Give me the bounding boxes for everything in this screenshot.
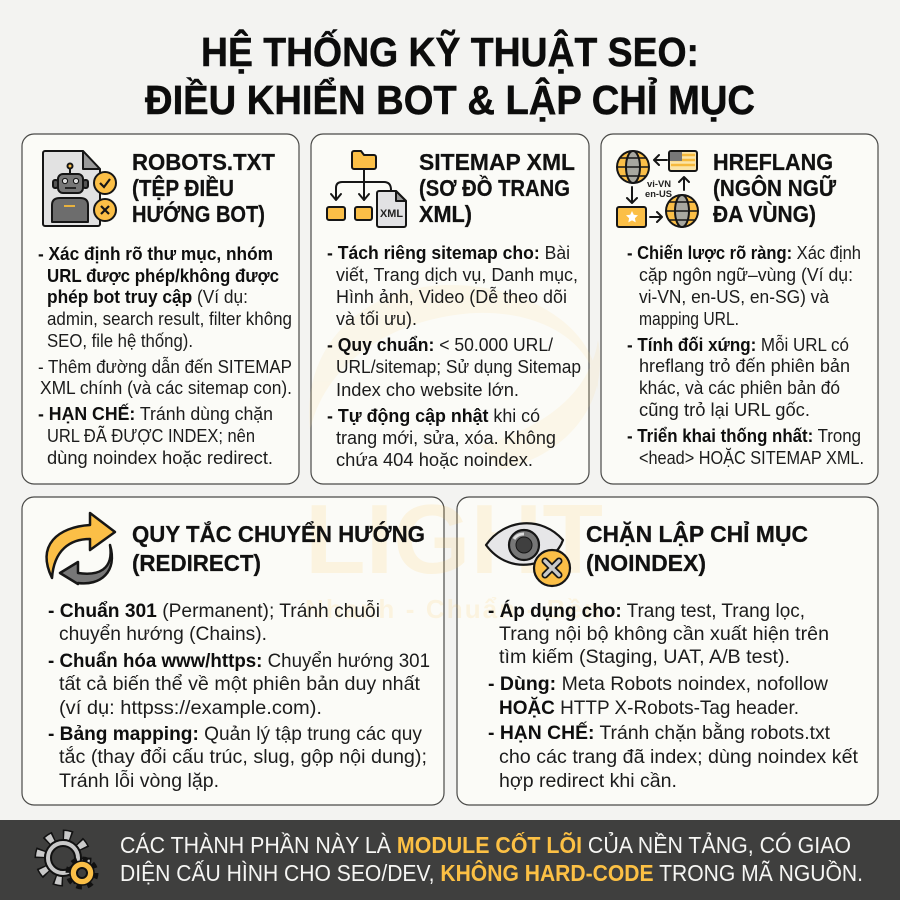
title: HỆ THỐNG KỸ THUẬT SEO: — [201, 29, 699, 75]
heading: robots.txt: HƯỚNG BOT) — [132, 200, 265, 227]
panel: sitemap card — [311, 134, 589, 484]
text block: robots.txt rules: - Thêm đường dẫn đến SITEMAP — [38, 356, 292, 377]
text block: sitemap rules: Hình ảnh, Video (Dễ theo dõi — [336, 286, 567, 307]
watermark logo: LIGHT — [305, 484, 603, 594]
text block: sitemap rules: và tối ưu). — [336, 309, 417, 329]
text block: hreflang rules: hreflang trỏ đến phiên bản — [639, 356, 850, 376]
text block: hreflang rules: - Tính đối xứng: Mỗi URL có — [627, 334, 849, 355]
text block: robots.txt rules: dùng noindex hoặc redirect. — [47, 448, 273, 468]
text block: hreflang rules: khác, và các phiên bản đó — [639, 378, 840, 398]
heading: redirect: (REDIRECT) — [132, 550, 261, 576]
heading: redirect: QUY TẮC CHUYỂN HƯỚNG — [132, 520, 425, 547]
text block: robots.txt rules: phép bot truy cập (Ví dụ: — [47, 287, 248, 307]
text block: hreflang rules: cặp ngôn ngữ–vùng (Ví dụ: — [639, 265, 853, 285]
heading: sitemap xml: XML) — [419, 201, 472, 227]
text block: hreflang rules: vi-VN, en-US, en-SG) và — [639, 287, 830, 307]
text block: robots.txt rules: SEO, file hệ thống). — [47, 331, 193, 351]
heading: noindex: (NOINDEX) — [586, 550, 706, 576]
text block: sitemap rules: trang mới, sửa, xóa. Không — [336, 428, 556, 448]
heading: robots.txt: (TỆP ĐIỀU — [132, 174, 234, 201]
heading: noindex — [586, 519, 808, 576]
heading: noindex: CHẶN LẬP CHỈ MỤC — [586, 519, 808, 547]
watermark logo: Nhanh - Chuẩn - Bền — [305, 594, 600, 624]
icon: gears — [40, 835, 95, 886]
panel: robots.txt card — [22, 134, 299, 484]
text block: redirect rules: chuyển hướng (Chains). — [59, 624, 267, 645]
title — [145, 29, 755, 123]
text block: sitemap rules: Index cho website lớn. — [336, 380, 519, 400]
heading: sitemap xml — [419, 149, 575, 227]
text block: noindex rules: - HẠN CHẾ: Tránh chặn bằng robots.txt — [488, 722, 831, 744]
text block: robots.txt rules — [38, 244, 292, 468]
text block: noindex rules: tìm kiếm (Staging, UAT, A/B test). — [499, 647, 790, 668]
text block: noindex rules: HOẶC HTTP X-Robots-Tag header. — [499, 697, 799, 719]
panel: hreflang card — [601, 134, 878, 484]
icon: hreflang globes and flags — [617, 151, 698, 227]
heading: sitemap xml: SITEMAP XML — [419, 149, 575, 175]
heading: hreflang — [713, 149, 836, 227]
text block: hreflang rules: cũng trỏ lại URL gốc. — [639, 400, 810, 420]
text block: noindex rules: hợp redirect khi cần. — [499, 771, 677, 792]
text block: robots.txt rules: - HẠN CHẾ: Tránh dùng chặn — [38, 403, 273, 424]
text block: sitemap rules: chứa 404 hoặc noindex. — [336, 450, 533, 470]
text block: noindex rules: Trang nội bộ không cần xuất hiện trên — [499, 624, 829, 645]
text block: hreflang rules: mapping URL. — [639, 309, 739, 329]
heading: hreflang: ĐA VÙNG) — [713, 200, 816, 227]
text block: robots.txt rules: URL được phép/không được — [47, 266, 279, 286]
text block: hreflang rules: - Chiến lược rõ ràng: Xác định — [627, 243, 861, 263]
footer bar — [0, 820, 900, 900]
text block: redirect rules: tất cả biến thể về một phiên bản duy nhất — [59, 674, 421, 695]
text block: noindex rules: - Áp dụng cho: Trang test, Trang lọc, — [488, 600, 805, 622]
panel: redirect card — [22, 497, 444, 805]
text block: redirect rules: tắc (thay đổi cấu trúc, slug, gộp nội dung); — [59, 746, 427, 768]
heading: sitemap xml: (SƠ ĐỒ TRANG — [419, 174, 570, 201]
text block: sitemap rules: - Quy chuẩn: < 50.000 URL/ — [327, 335, 554, 355]
icon: crossed eye — [486, 523, 570, 586]
footer text: CÁC THÀNH PHẦN NÀY LÀ MODULE CỐT LÕI CỦA NỀN TẢNG, CÓ GIAO — [120, 830, 851, 858]
footer text — [120, 830, 863, 886]
text block: robots.txt rules: - Xác định rõ thư mục, nhóm — [38, 244, 273, 264]
text block: redirect rules: (ví dụ: httpss://example.com). — [59, 698, 322, 719]
text block: redirect rules — [48, 600, 430, 792]
text block: sitemap rules: - Tự động cập nhật khi có — [327, 406, 540, 426]
watermark logo — [305, 285, 603, 624]
heading: robots.txt: ROBOTS.TXT — [132, 149, 276, 175]
text block: sitemap rules: - Tách riêng sitemap cho: Bài — [327, 243, 570, 263]
text block: robots.txt rules: XML chính (và các sitemap con). — [40, 378, 292, 398]
text block: redirect rules: - Chuẩn hóa www/https: Chuyển hướng 301 — [48, 651, 430, 672]
text block: noindex rules: - Dùng: Meta Robots noindex, nofollow — [488, 674, 828, 695]
panel: noindex card — [457, 497, 878, 805]
text block: sitemap rules: viết, Trang dịch vụ, Danh mục, — [336, 265, 578, 285]
text block: robots.txt rules: URL ĐÃ ĐƯỢC INDEX; nên — [47, 425, 255, 446]
icon: robot document — [43, 151, 116, 226]
heading: hreflang: (NGÔN NGỮ — [713, 174, 836, 201]
icon: sitemap tree — [327, 151, 406, 227]
title: ĐIỀU KHIỂN BOT & LẬP CHỈ MỤC — [145, 76, 755, 123]
icon: hreflang globes and flags: vi-VN — [647, 179, 671, 190]
text block: sitemap rules — [327, 243, 581, 470]
heading: redirect — [132, 520, 425, 576]
heading: robots.txt — [132, 149, 276, 227]
text block: sitemap rules: URL/sitemap; Sử dụng Sitemap — [336, 357, 581, 377]
text block: redirect rules: - Chuẩn 301 (Permanent); Tránh chuỗi — [48, 600, 380, 622]
footer text: DIỆN CẤU HÌNH CHO SEO/DEV, KHÔNG HARD-CODE TRONG MÃ NGUỒN. — [120, 859, 863, 886]
text block: hreflang rules — [627, 243, 864, 468]
text block: robots.txt rules: admin, search result, filter không — [47, 309, 292, 329]
heading: hreflang: HREFLANG — [713, 149, 833, 175]
text block: noindex rules — [488, 600, 859, 792]
text block: hreflang rules: <head> HOẶC SITEMAP XML. — [639, 448, 864, 468]
text block: redirect rules: - Bảng mapping: Quản lý tập trung các quy — [48, 724, 422, 745]
icon: redirect arrows — [47, 513, 115, 584]
text block: noindex rules: cho các trang đã index; dùng noindex kết — [499, 747, 859, 768]
icon: sitemap tree: XML — [380, 208, 403, 220]
icon: hreflang globes and flags: en-US — [645, 189, 672, 200]
text block: redirect rules: Tránh lỗi vòng lặp. — [59, 770, 219, 792]
text block: hreflang rules: - Triển khai thống nhất: Trong — [627, 426, 861, 446]
